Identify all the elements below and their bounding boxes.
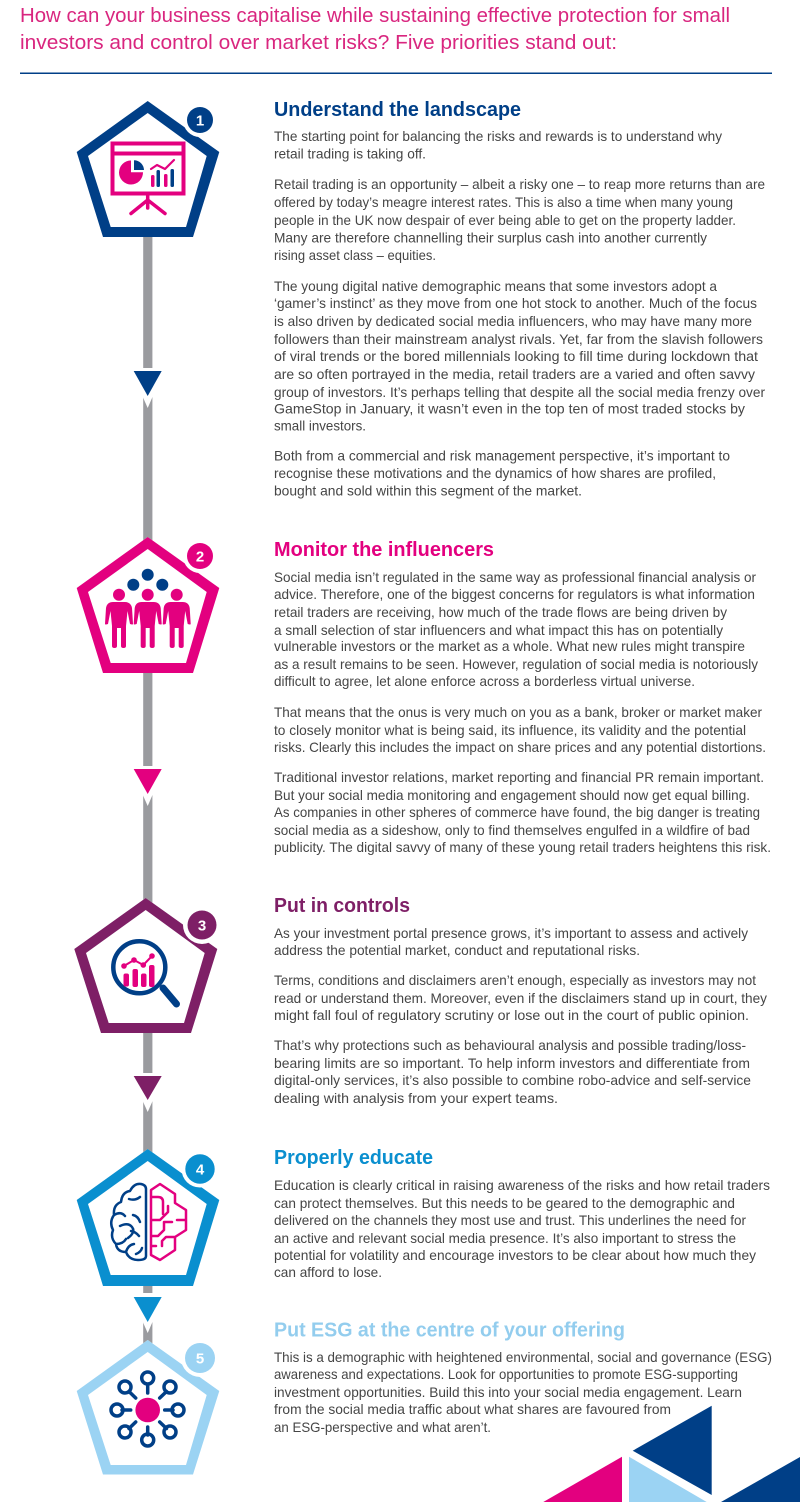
section 4 body text: potential for volatility and encourage investors to be clear about how much they [274,1247,756,1263]
section 5 body text: awareness and expectations. Look for opportunities to promote ESG-supporting [274,1366,738,1382]
section 5 body text: an ESG-perspective and what aren’t. [274,1419,491,1435]
section 3 body text: bearing limits are so important. To help inform investors and differentiate from [274,1055,750,1071]
title: investors and control over market risks? Five priorities stand out: [20,32,617,54]
section 1 body text: ‘gamer’s instinct’ as they move from one hot stock to another. Much of the focus [274,295,757,311]
pentagon 1 with presentation icon [77,101,219,237]
section 1 body text: are so often portrayed in the media, retail traders are a varied and often savvy [274,366,755,382]
badge 2: 2 [196,548,204,566]
pentagon 5 with network icon [77,1339,219,1474]
section 3 body text: read or understand them. Moreover, even if the disclaimers stand up in court, they [274,990,767,1006]
icon: presentation board [112,144,184,214]
section 1 body text: is also driven by dedicated social media influencers, who may have many more [274,313,752,329]
section 1 heading: Understand the landscape [274,99,521,121]
section 1 body text: The young digital native demographic means that some investors adopt a [274,278,717,294]
section 1 body text: recognise these motivations and the dynamics of how shares are profiled, [274,465,716,481]
section 2 body text: risks. Clearly this includes the impact on share prices and any potential distortions. [274,739,766,755]
section 1 body text: Many are therefore channelling their surplus cash into another currently [274,230,707,246]
section 1 body text: group of investors. It’s perhaps telling that despite all the social media frenzy over [274,384,765,400]
section 2 body text: to closely monitor what is being said, its influence, its validity and the potential [274,722,746,738]
section 1 body text [274,128,765,498]
section 2 body text: Traditional investor relations, market reporting and financial PR remain important. [274,769,764,785]
section 4 heading: Properly educate [274,1147,433,1169]
timeline rail [130,230,165,1350]
section 1 body text: of viral trends or the bored millennials looking to fill time during lockdown that [274,348,758,364]
arrow 3 [134,1076,162,1100]
section 3 body text: Terms, conditions and disclaimers aren’t enough, especially as investors may not [274,972,756,988]
badge 4 [185,1154,215,1184]
section 3 body text: might fall foul of regulatory scrutiny or lose out in the court of public opinion. [274,1007,749,1023]
section 3 body text [274,925,767,1106]
section 5 body text [274,1349,772,1435]
section 4 body text: can afford to lose. [274,1264,382,1280]
icon: people [105,569,191,648]
arrow 4 [134,1297,162,1322]
section 2 heading: Monitor the influencers [274,539,494,561]
section 2 body text: a small selection of star influencers and what impact this has on potentially [274,622,723,638]
section 1 body text: followers than their mainstream analyst rivals. Yet, far from the slavish followers [274,331,763,347]
section 1 body text: retail trading is taking off. [274,146,426,162]
section 2 body text: As companies in other spheres of commerce have found, the big danger is treating [274,804,760,820]
section 1 body text: Both from a commercial and risk management perspective, it’s important to [274,448,730,464]
pentagon 2 with people icon [77,537,219,673]
section 2 body text: publicity. The digital savvy of many of these young retail traders heightens this risk. [274,839,771,855]
section 5 body text: from the social media traffic about what shares are favoured from [274,1401,671,1417]
section 1 body text: Retail trading is an opportunity – albeit a risky one – to reap more returns than are [274,176,765,192]
section 2 body text: retail traders are receiving, how much of the trade flows are being driven by [274,604,727,620]
section 2 body text: social media as a sideshow, only to find themselves engulfed in a wildfire of bad [274,822,750,838]
section 1 body text: GameStop in January, it wasn’t even in the top ten of most traded stocks by [274,400,745,416]
badge 2 [187,543,213,569]
section 3 body text: address the potential market, conduct and reputational risks. [274,942,640,958]
section 4 body text: an active and relevant social media presence. It’s also important to stress the [274,1230,736,1246]
arrow 1 [134,371,162,396]
section 3 body text: That’s why protections such as behavioural analysis and possible trading/loss- [274,1037,746,1053]
decorative corner triangles [543,1406,800,1502]
section 1 body text: small investors. [274,418,366,434]
section 2 body text: But your social media monitoring and engagement should now get equal billing. [274,787,750,803]
title [20,5,730,54]
section 2 body text: difficult to agree, let alone enforce across a borderless virtual universe. [274,673,695,689]
section 2 body text: advice. Therefore, one of the biggest concerns for regulators is what information [274,586,755,602]
badge 4: 4 [196,1162,205,1178]
section 1 body text: The starting point for balancing the risks and rewards is to understand why [274,128,722,144]
badge 1 [187,107,213,133]
section 4 body text: can protect themselves. But this needs to be geared to the demographic and [274,1195,735,1211]
section 3 heading: Put in controls [274,895,410,917]
icon: network [111,1372,184,1446]
badge 3 [188,910,216,940]
title: How can your business capitalise while sustaining effective protection for small [20,5,730,27]
badge 5 [185,1343,215,1373]
section 3 body text: dealing with analysis from your expert teams. [274,1090,558,1106]
section 2 body text: That means that the onus is very much on you as a bank, broker or market maker [274,704,762,720]
section 5 body text: investment opportunities. Build this into your social media engagement. Learn [274,1384,742,1400]
section 1 body text: bought and sold within this segment of the market. [274,482,582,498]
section 5 body text: This is a demographic with heightened environmental, social and governance (ESG) [274,1349,772,1365]
section 1 body text: rising asset class – equities. [274,247,436,263]
badge 5: 5 [196,1350,204,1368]
section 2 body text: vulnerable investors or the market as a whole. What new rules might transpire [274,638,745,654]
section 5 heading: Put ESG at the centre of your offering [274,1320,625,1342]
section 2 body text: as a result remains to be seen. However, regulation of social media is notoriously [274,656,758,672]
icon: brain [111,1184,186,1260]
section 4 body text [274,1177,770,1280]
section 4 body text: Education is clearly critical in raising awareness of the risks and how retail traders [274,1177,770,1193]
section 1 body text: people in the UK now despair of ever being able to get on the property ladder. [274,212,736,228]
section 3 body text: digital-only services, it’s also possible to combine robo-advice and self-service [274,1072,751,1088]
section 1 body text: offered by today’s meagre interest rates. This is also a time when many young [274,194,733,210]
arrow 2 [134,769,162,794]
badge 3: 3 [198,918,206,934]
section 4 body text: delivered on the channels they most use and trust. This underlines the need for [274,1212,746,1228]
badge 1: 1 [196,112,204,130]
section 2 body text [274,569,771,855]
pentagon 3 with magnifier icon [74,898,221,1033]
section 2 body text: Social media isn’t regulated in the same way as professional financial analysis or [274,569,756,585]
pentagon 4 with brain icon [77,1149,219,1286]
section 3 body text: As your investment portal presence grows, it’s important to assess and actively [274,925,748,941]
icon: magnifier with chart [113,941,176,1004]
